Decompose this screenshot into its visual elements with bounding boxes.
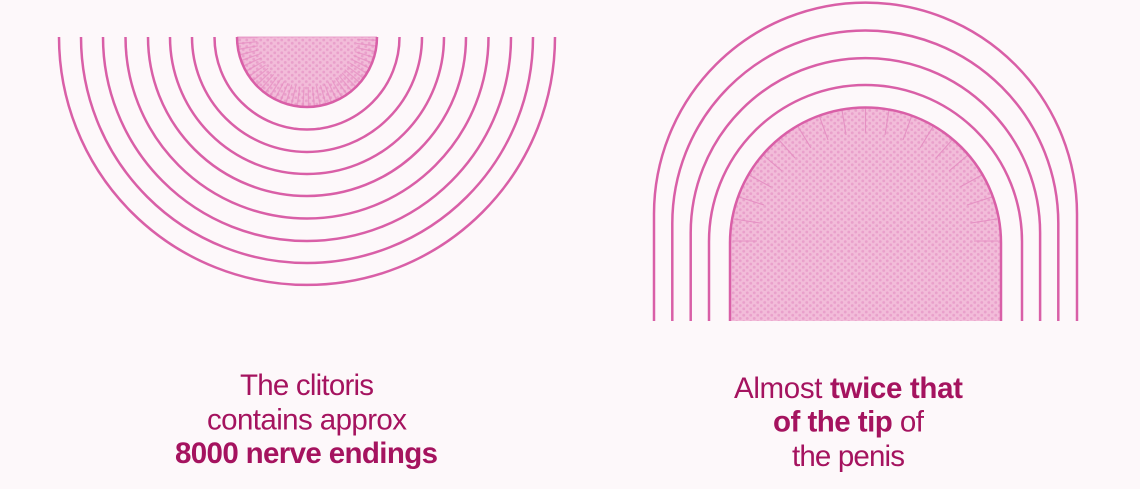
- clitoris semicircle: [237, 37, 377, 107]
- caption: clitoris nerve endings: 8000 nerve endings: [175, 437, 438, 470]
- caption: clitoris nerve endings: [175, 369, 438, 470]
- caption: comparison with penis: of the tip of: [773, 406, 925, 438]
- caption: comparison with penis: [734, 372, 963, 473]
- caption: clitoris nerve endings: The clitoris: [240, 369, 374, 402]
- right diagram: penis tip nerve arcs: [654, 3, 1077, 321]
- nested arches around penis tip: [654, 3, 1077, 321]
- caption: comparison with penis: the penis: [792, 440, 905, 473]
- nerve ticks: [733, 108, 998, 241]
- penis tip filled shape: [730, 108, 1001, 321]
- caption: comparison with penis: Almost twice that: [734, 372, 963, 405]
- left diagram: clitoris nerve arcs: [59, 37, 555, 285]
- caption: clitoris nerve endings: contains approx: [207, 404, 407, 436]
- concentric arcs around clitoris: [59, 37, 555, 285]
